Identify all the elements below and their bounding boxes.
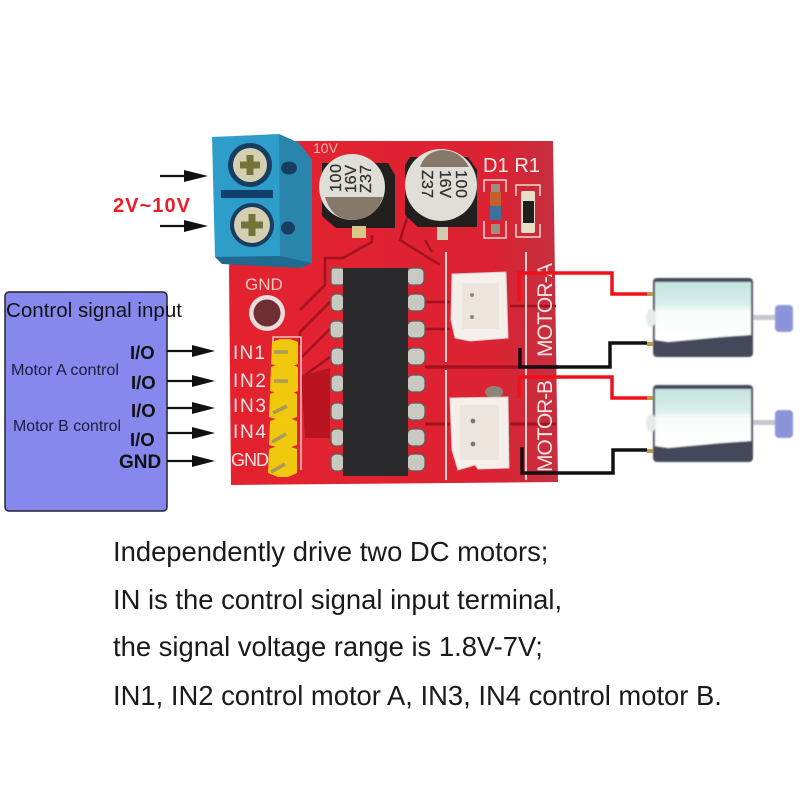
board silk labels (231, 140, 557, 472)
description text (113, 536, 722, 711)
circuit board (229, 140, 558, 485)
diode and resistor (484, 180, 540, 238)
capacitor left (319, 154, 395, 238)
pin labels: GND (119, 452, 161, 473)
label: motor B control: Motor B control (13, 418, 121, 435)
board divider lines (446, 252, 526, 480)
description text: the signal voltage range is 1.8V-7V; (113, 631, 543, 662)
board silk labels: MOTOR-B (534, 380, 557, 472)
capacitor right: 100 (452, 170, 469, 198)
board silk labels: IN4 (233, 422, 266, 443)
description text: Independently drive two DC motors; (113, 536, 548, 567)
pin labels (119, 342, 161, 473)
description text: IN is the control signal input terminal, (113, 584, 562, 615)
capacitor left: 100 (328, 164, 345, 192)
board silk labels: MOTOR-A (534, 263, 557, 357)
chip pads (330, 268, 425, 471)
wires: motor A (519, 273, 647, 367)
terminal block (212, 134, 312, 268)
header pins (268, 337, 301, 477)
capacitor right: Z37 (418, 170, 435, 198)
voltage label: 2V~10V (113, 195, 191, 217)
board silk labels: IN3 (233, 396, 266, 417)
pin labels: I/O (130, 429, 155, 450)
label: motor A control: Motor A control (11, 362, 119, 379)
mounting hole (249, 295, 285, 331)
JST connector A (451, 272, 508, 341)
board silk labels: D1 R1 (483, 155, 540, 177)
panel heading: Control signal input (6, 300, 182, 322)
panel: control signal input (5, 292, 182, 511)
board copper traces (300, 215, 558, 424)
board silk labels: IN1 (233, 343, 265, 364)
capacitor right: 16V (436, 170, 453, 198)
pin blocks (268, 339, 298, 477)
board silk labels: GND (245, 275, 283, 294)
motor A (646, 278, 793, 357)
wires: motor B (519, 377, 647, 473)
capacitor left: Z37 (358, 165, 375, 193)
board silk labels: IN2 (233, 371, 266, 392)
description text: IN1, IN2 control motor A, IN3, IN4 control motor B. (113, 680, 722, 711)
capacitor right (405, 149, 477, 240)
JST connector B (450, 386, 509, 470)
pin labels: I/O (131, 372, 156, 393)
IC chip (330, 268, 425, 476)
capacitor left: 16V (343, 165, 360, 193)
board silk labels: 10V (313, 140, 339, 156)
pin labels: I/O (131, 400, 156, 421)
motor B (646, 385, 793, 462)
arrows: power input (160, 170, 208, 232)
arrows: signal inputs (167, 345, 215, 467)
board silk labels: GND (231, 450, 269, 470)
pin labels: I/O (130, 342, 155, 363)
